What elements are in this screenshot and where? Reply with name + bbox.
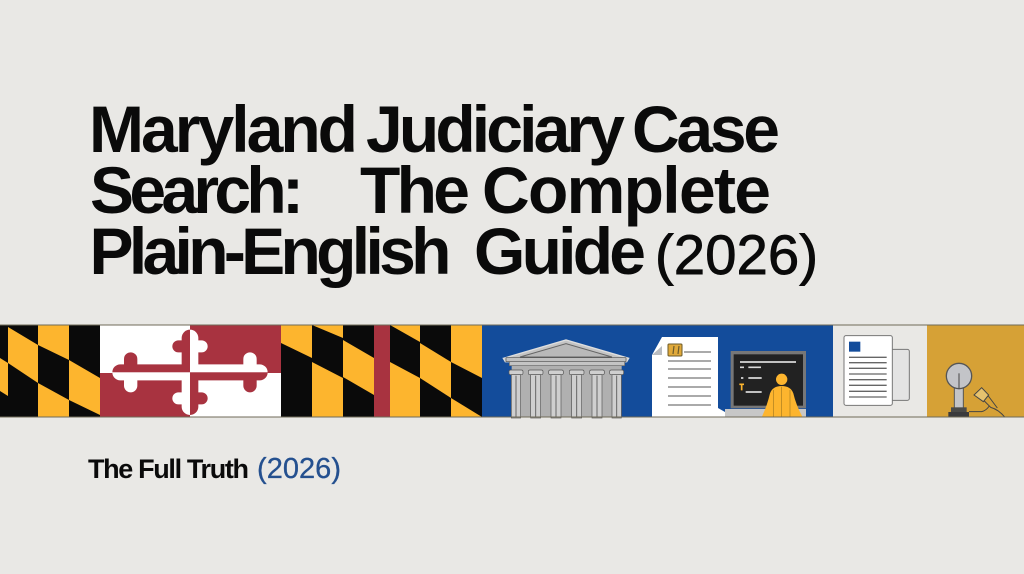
title xyxy=(89,92,818,288)
icon: document xyxy=(652,337,725,417)
title: Complete xyxy=(482,153,771,227)
title: Search: xyxy=(90,153,304,227)
title: Maryland xyxy=(89,92,358,166)
checker panel right xyxy=(281,325,482,417)
flag cross panel xyxy=(100,325,281,417)
icon: lamp and plug xyxy=(946,363,1005,417)
subtitle: (2026) xyxy=(257,453,341,485)
subtitle: The Full Truth xyxy=(88,454,249,484)
checker panel left xyxy=(0,325,100,417)
icon: laptop with figure xyxy=(725,351,806,417)
title: (2026) xyxy=(655,223,818,286)
blue panel xyxy=(482,325,833,417)
gold panel xyxy=(927,325,1024,417)
title: The xyxy=(360,153,470,227)
icon: stacked papers xyxy=(844,336,909,405)
banner strip xyxy=(0,325,1024,418)
light panel xyxy=(833,325,927,417)
subtitle xyxy=(88,453,341,485)
title: Plain-English xyxy=(90,214,452,288)
title: Judiciary xyxy=(366,92,625,166)
icon: courthouse xyxy=(503,340,629,418)
title: Guide xyxy=(474,214,646,288)
red stripe xyxy=(374,325,390,417)
strip borders xyxy=(0,325,1024,417)
title: Case xyxy=(632,92,780,166)
